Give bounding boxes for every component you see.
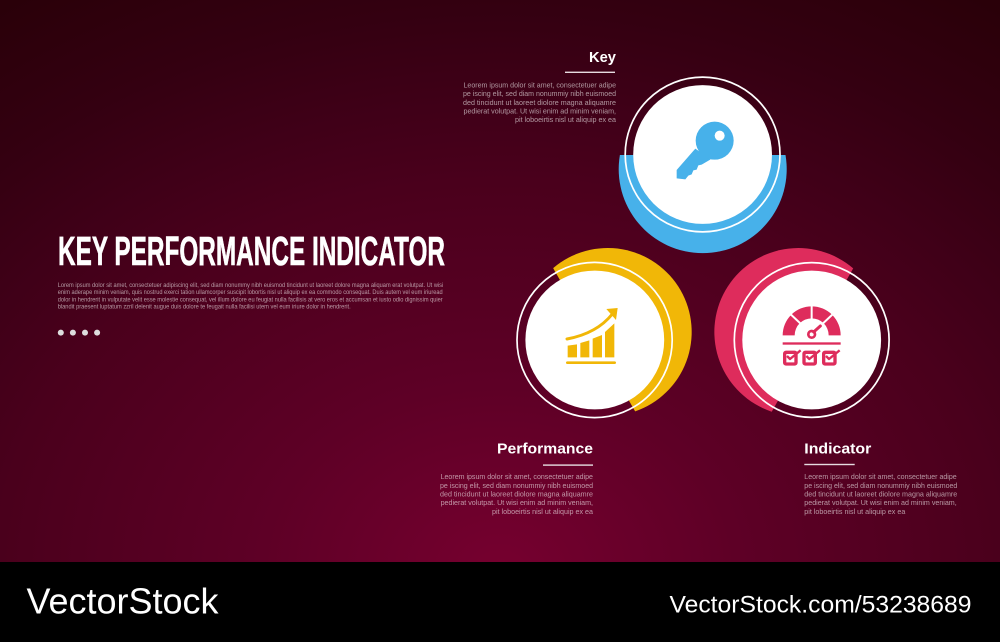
panel: performance text: pedierat volutpat. Ut wisi enim ad minim veniam, [441, 498, 593, 507]
panel: indicator text: pit loboeirtis nisl ut aliquip ex ea [804, 507, 905, 516]
panel: key text: Key [589, 49, 617, 66]
panel: performance text: ded tincidunt ut laoreet diolore magna aliquamre [440, 490, 593, 499]
panel: key text: pe iscing elit, sed diam nonummiy nibh euismoed [463, 89, 616, 98]
panel: key text: Leorem ipsum dolor sit amet, consectetuer adipe [464, 80, 616, 89]
footer bar [0, 562, 1000, 642]
intro paragraph [58, 282, 443, 310]
panel: performance text: pit loboeirtis nisl ut aliquip ex ea [492, 507, 593, 516]
title: KEY PERFORMANCE INDICATOR [58, 228, 445, 274]
circle: performance [517, 248, 692, 418]
panel: indicator text: ded tincidunt ut laoreet diolore magna aliquamre [804, 490, 957, 499]
panel: performance text [440, 440, 593, 516]
panel: performance text: Leorem ipsum dolor sit amet, consectetuer adipe [441, 472, 593, 481]
intro paragraph: enim aderape minim veniam, quis nostrud exerci tation ullamcorper suscipit lobortis nisl ut aliquip ex ea commodo consequat. Duis autem vel eum iriuread [58, 289, 443, 296]
icon: growth chart [566, 308, 618, 364]
footer bar: VectorStock [26, 580, 219, 622]
pagination dots [58, 330, 100, 336]
panel: indicator text: pe iscing elit, sed diam nonummiy nibh euismoed [804, 481, 957, 490]
panel: key text: pedierat volutpat. Ut wisi enim ad minim veniam, [464, 106, 616, 115]
panel: indicator text: Leorem ipsum dolor sit amet, consectetuer adipe [804, 472, 957, 481]
icon: gauge with checkboxes [783, 305, 841, 364]
intro paragraph: blandit praesent luptatum zzril delenit augue duis dolore te feugait nulla facilisi utem vel eum iriure dolor in hendrerit. [58, 304, 351, 310]
panel: indicator text: pedierat volutpat. Ut wisi enim ad minim veniam, [804, 498, 957, 507]
icon: key [677, 122, 734, 179]
circle: key [619, 77, 787, 253]
panel: performance text: Performance [497, 440, 593, 457]
panel: indicator text: Indicator [804, 440, 871, 457]
panel: key text: pit loboeirtis nisl ut aliquip ex ea [515, 115, 616, 124]
panel: indicator text [804, 440, 957, 516]
intro paragraph: dolor in hendrerit in vulputate velit esse molestie consequat, vel illum dolore eu feugiat nulla facilisis at vero eros et accumsan et iusto odio dignissim quier [58, 296, 443, 303]
panel: performance text: pe iscing elit, sed diam nonummiy nibh euismoed [440, 481, 593, 490]
footer bar: VectorStock.com/53238689 [670, 592, 972, 618]
circle: indicator [714, 248, 889, 417]
intro paragraph: Lorem ipsum dolor sit amet, consectetuer adipiscing elit, sed diam nonummy nibh euismod tincidunt ut laoreet dolore magna aliquam erat volutpat. Ut wisi [58, 282, 443, 289]
panel: key text [463, 49, 617, 124]
panel: key text: ded tincidunt ut laoreet diolore magna aliquamre [463, 98, 616, 107]
